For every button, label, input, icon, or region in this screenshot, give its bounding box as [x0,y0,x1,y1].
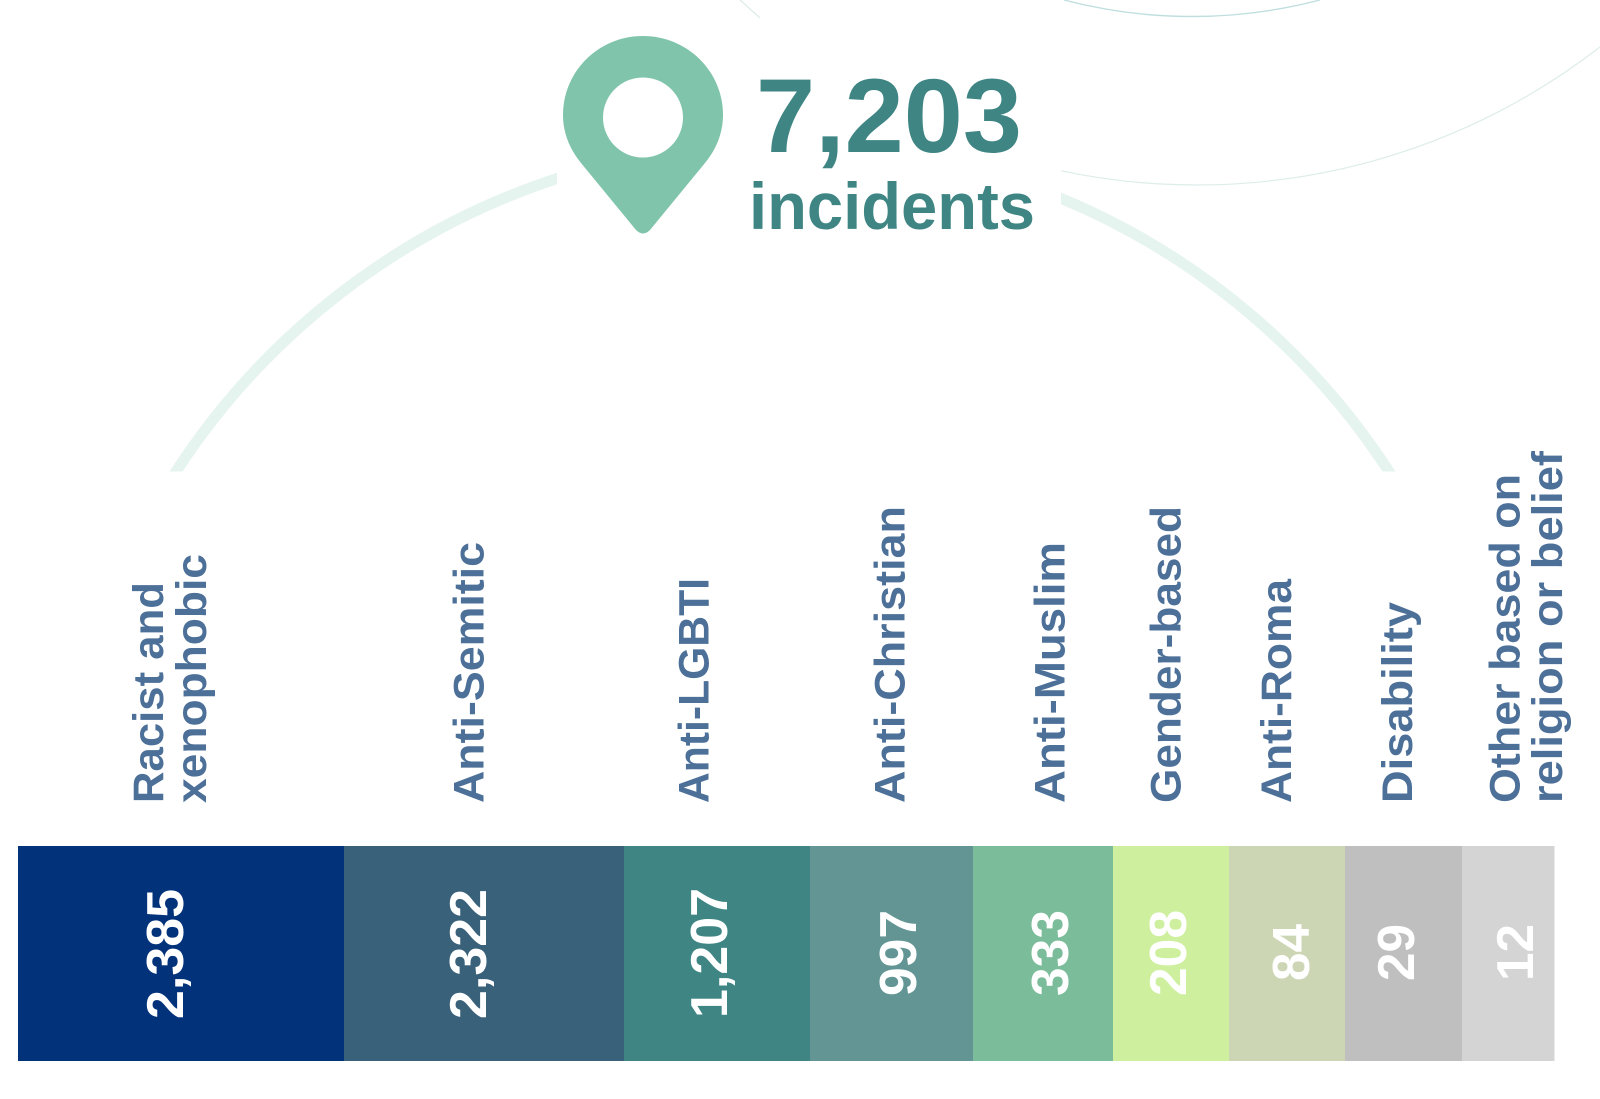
label: Racist and xenophobic [125,554,216,803]
segment: Other 12 [1462,846,1554,1061]
segment: Anti-Christian 997 [810,846,973,1061]
background decorative arcs [740,0,1600,185]
headline: total incidents [749,58,1035,243]
segment: Gender-based 208 [1113,846,1229,1061]
label: Other based on religion or belief: Other based on [1482,474,1530,803]
label: Racist and xenophobic: Racist and [125,582,173,803]
label: Other based on religion or belief: religion or belief [1524,450,1572,803]
segment: Racist and xenophobic 2,385: 2,385 [137,889,195,1019]
segment: Anti-Muslim 333 [973,846,1113,1061]
segment: Anti-Muslim 333: 333 [1022,910,1080,996]
segment: Disability 29 [1345,846,1462,1061]
label: Anti-Semitic: Anti-Semitic [446,542,494,803]
segment: Racist and xenophobic 2,385 [18,846,344,1061]
label: Racist and xenophobic: xenophobic [168,554,216,803]
segment: Gender-based 208: 208 [1140,910,1198,996]
label: Anti-Muslim: Anti-Muslim [1026,542,1074,803]
headline: total incidents: incidents [749,169,1035,243]
segment: Anti-Semitic 2,322: 2,322 [440,889,498,1019]
label: Anti-LGBTI: Anti-LGBTI [670,578,718,803]
segment: Anti-Christian 997: 997 [870,910,928,996]
large arc spanning the bar [164,174,1401,490]
segment: Anti-LGBTI 1,207 [624,846,810,1061]
segment: Anti-Roma 84 [1229,846,1345,1061]
headline: total incidents: 7,203 [756,58,1022,175]
category labels [125,450,1572,803]
segment: Disability 29: 29 [1368,924,1426,981]
label: Gender-based: Gender-based [1142,506,1190,803]
stacked bar [18,846,1554,1061]
label: Anti-Christian: Anti-Christian [866,506,914,803]
label: Anti-Roma: Anti-Roma [1253,578,1301,803]
label: Disability: Disability [1374,602,1422,803]
icon: location pin [563,36,723,234]
segment: Other 12: 12 [1487,924,1545,981]
segment: Anti-LGBTI 1,207: 1,207 [681,888,739,1018]
label: Other based on religion or belief [1482,450,1572,803]
segment: Anti-Semitic 2,322 [344,846,624,1061]
segment: Anti-Roma 84: 84 [1263,924,1321,981]
